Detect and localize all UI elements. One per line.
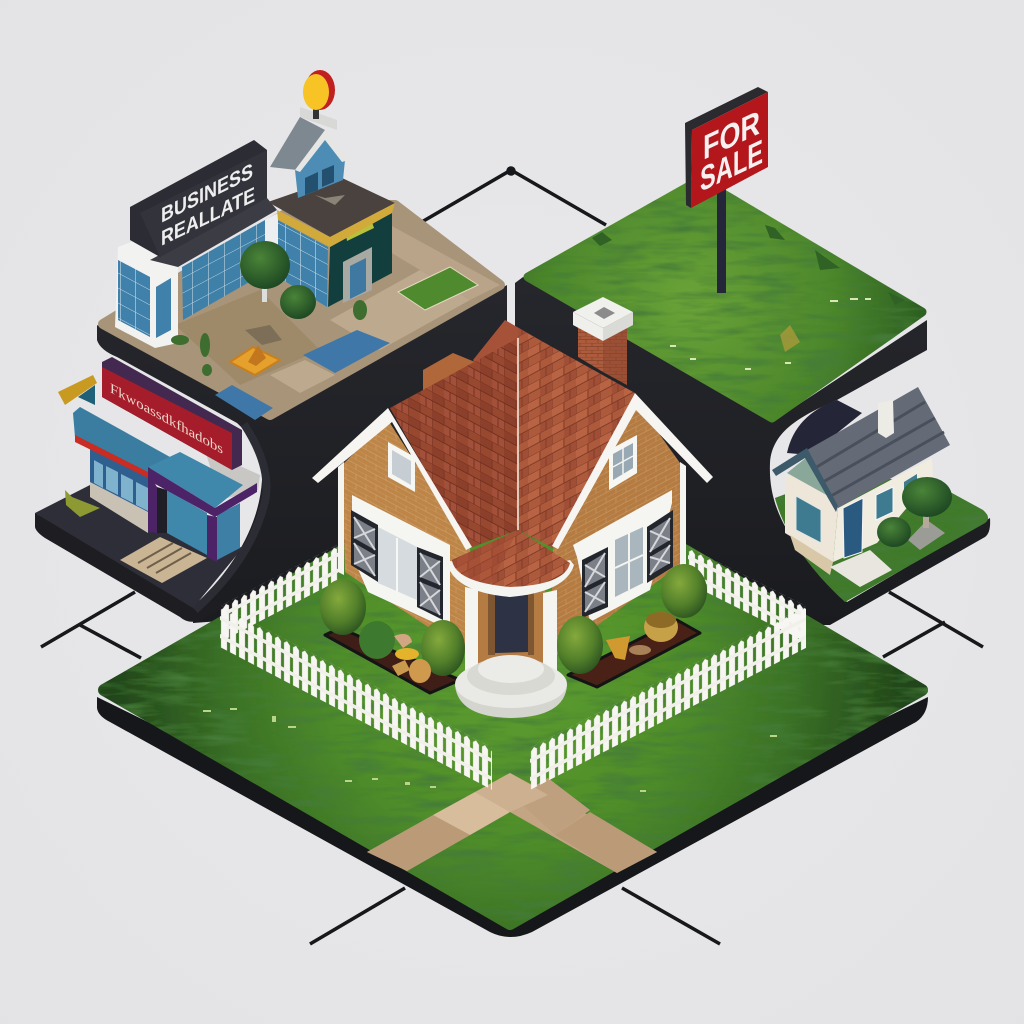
tower side window bbox=[156, 278, 171, 338]
right fence bbox=[530, 606, 806, 790]
tufts and flecks bbox=[592, 225, 905, 305]
house bbox=[312, 297, 713, 718]
right block bbox=[500, 277, 990, 625]
curved ring left bbox=[195, 424, 266, 610]
for sale sign bbox=[685, 87, 768, 293]
blue pool bbox=[303, 330, 390, 373]
tower block bbox=[115, 235, 178, 348]
sign text: Fkwoassdkfhadobs bbox=[110, 381, 223, 458]
entry mat bbox=[120, 537, 207, 583]
shop right face bbox=[328, 213, 392, 307]
sign text: BUSINESS bbox=[161, 158, 253, 228]
connector lines bbox=[41, 168, 983, 944]
panel: shop lot surface bbox=[35, 485, 245, 608]
corner trims bbox=[338, 462, 344, 575]
left big window bbox=[351, 495, 450, 630]
door gap bbox=[157, 487, 167, 533]
garden decor bbox=[392, 612, 678, 683]
roof bbox=[807, 387, 950, 508]
rooftop cottage roof bbox=[270, 117, 325, 170]
canopy top bbox=[148, 452, 243, 508]
facade side strip bbox=[265, 213, 278, 277]
left barge boards bbox=[312, 408, 472, 550]
shutter right bbox=[417, 547, 443, 620]
left fence bbox=[220, 605, 492, 790]
panel: for sale lot surface bbox=[528, 180, 922, 418]
storefront interior bbox=[167, 490, 207, 555]
gable bbox=[787, 457, 830, 497]
garden path bbox=[367, 773, 657, 873]
mulch beds bbox=[325, 620, 700, 693]
rooftop debris bbox=[315, 195, 345, 205]
green patch bbox=[398, 267, 478, 310]
eave bbox=[772, 448, 838, 512]
right roof face bbox=[518, 328, 635, 548]
canopy fascia bbox=[148, 467, 257, 517]
sign text: FOR bbox=[703, 103, 760, 168]
navy wall bbox=[90, 448, 150, 513]
tree bbox=[240, 241, 290, 302]
panel: dark base blocks bbox=[35, 277, 990, 650]
right glass bbox=[217, 503, 240, 560]
steps bbox=[830, 550, 892, 587]
right big window bbox=[573, 490, 673, 622]
olive debris bbox=[65, 490, 100, 517]
sign text bbox=[700, 103, 763, 200]
ground bbox=[775, 470, 988, 602]
shutter left bbox=[582, 547, 608, 618]
rooftop round sign bbox=[303, 70, 335, 119]
red stripe bbox=[75, 435, 148, 478]
sign body bbox=[130, 140, 267, 257]
rubble bbox=[245, 325, 282, 345]
facade roof bbox=[150, 198, 277, 267]
chimney bbox=[573, 297, 633, 385]
back fences bbox=[222, 545, 806, 642]
blue pool lower bbox=[215, 385, 273, 420]
board face bbox=[691, 92, 768, 208]
left wall bbox=[785, 457, 838, 562]
shop fascia bbox=[73, 407, 170, 477]
left roof face bbox=[390, 338, 518, 548]
door bbox=[843, 498, 863, 558]
foundation bbox=[790, 535, 833, 575]
steps bbox=[455, 655, 567, 718]
building: business real estate bbox=[115, 70, 395, 376]
pot bbox=[908, 520, 945, 550]
left block bbox=[97, 285, 507, 650]
small right window bbox=[609, 435, 637, 490]
sign text: SALE bbox=[700, 132, 763, 200]
grey block behind canopy bbox=[205, 450, 260, 500]
shop windows bbox=[94, 460, 148, 511]
front fences bbox=[220, 605, 806, 790]
tower windows bbox=[118, 260, 150, 337]
left wall bbox=[342, 420, 478, 660]
shop base bbox=[35, 513, 235, 622]
panel: bottom lawn with dark edge bbox=[97, 460, 928, 937]
lower wall bbox=[90, 482, 150, 533]
bush bbox=[877, 517, 911, 547]
sign front bbox=[140, 150, 267, 257]
porch wall and door bbox=[478, 585, 545, 665]
back roof bbox=[473, 320, 600, 420]
right barge boards bbox=[552, 393, 713, 549]
board edge bbox=[685, 87, 768, 208]
window right bbox=[876, 487, 893, 520]
sign red face bbox=[102, 367, 232, 470]
gold monument bbox=[230, 345, 280, 375]
large sign frame bbox=[102, 357, 242, 470]
shop roof bbox=[268, 177, 395, 237]
shop left face bbox=[278, 220, 328, 307]
canopy pillars bbox=[148, 473, 217, 562]
right wall bbox=[833, 458, 933, 562]
dark dome behind bbox=[787, 400, 862, 455]
porch roof bbox=[446, 530, 574, 597]
yellow bracket bbox=[58, 375, 97, 405]
chimney bbox=[878, 400, 894, 438]
shop door bbox=[343, 247, 372, 303]
rooftop cottage front bbox=[295, 137, 345, 198]
building: retail shop bbox=[58, 357, 260, 562]
glass facade bbox=[182, 220, 265, 320]
panel: business lot surface bbox=[103, 205, 500, 420]
window back bbox=[904, 474, 917, 492]
tree bbox=[902, 477, 952, 528]
cottage cap bbox=[300, 107, 337, 130]
right wall bbox=[550, 400, 680, 660]
porch columns bbox=[465, 587, 557, 677]
bush bbox=[280, 285, 316, 319]
vines bbox=[171, 300, 367, 376]
sign text: REALLATE bbox=[161, 182, 255, 251]
left chimney bbox=[423, 353, 475, 410]
panel: small house lot bbox=[772, 387, 988, 602]
grass flecks bbox=[203, 708, 777, 792]
shutter left bbox=[351, 510, 378, 582]
roof gold trim bbox=[277, 203, 395, 247]
window left bbox=[796, 496, 821, 543]
small left window bbox=[388, 442, 415, 492]
post bbox=[717, 186, 726, 293]
shutter right bbox=[647, 510, 673, 583]
bushes bbox=[320, 564, 707, 676]
